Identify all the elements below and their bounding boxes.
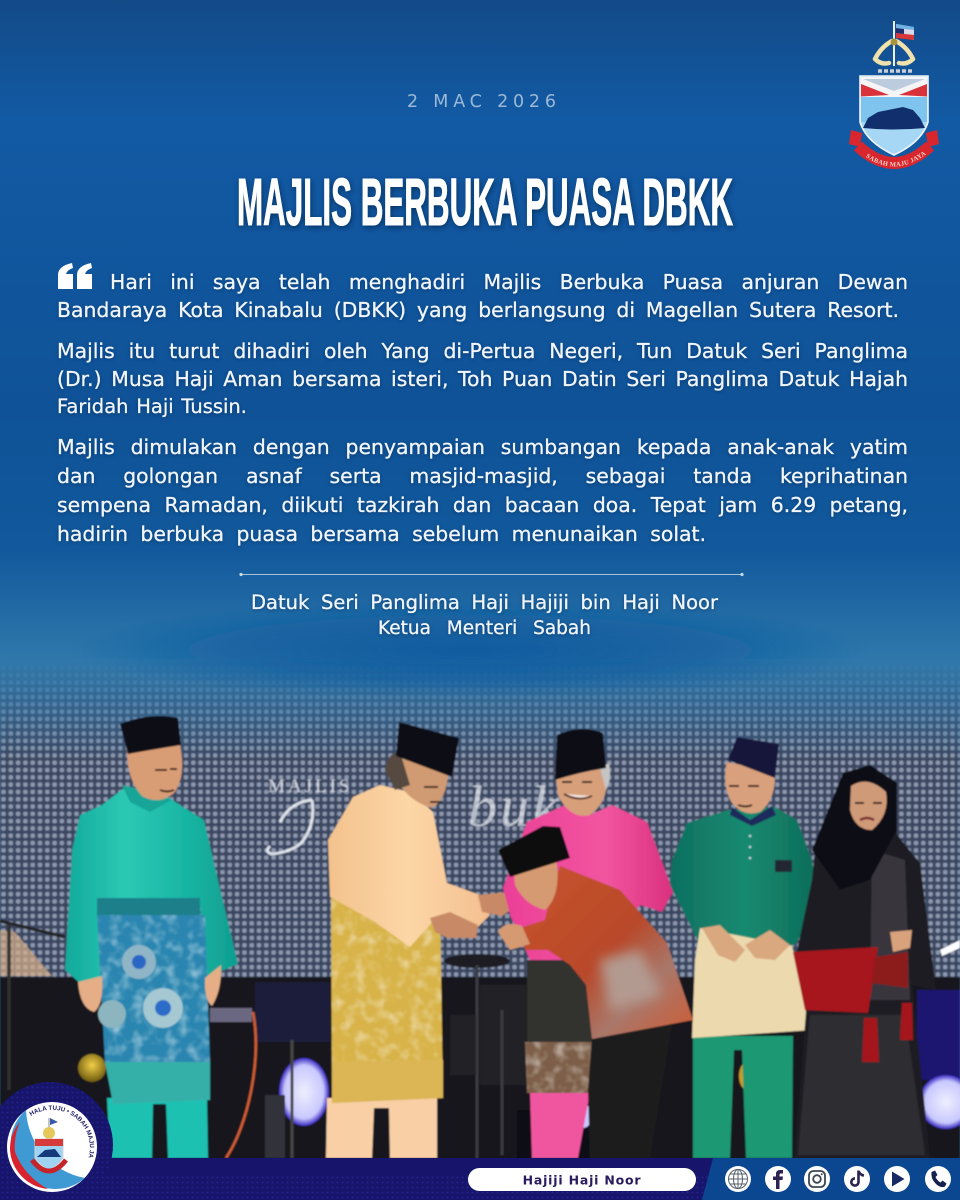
motto scroll: SABAH MAJU JAYA xyxy=(866,152,926,166)
motto scroll xyxy=(849,130,939,169)
LED screen backdrop: buka xyxy=(468,774,593,839)
circular logo badge xyxy=(0,1082,113,1192)
paragraph 1: Hari ini saya telah menghadiri Majlis Berbuka Puasa anjuran Dewan xyxy=(110,270,908,294)
paragraph 2: Majlis itu turut dihadiri oleh Yang di-Pertua Negeri, Tun Datuk Seri Panglima xyxy=(57,339,908,363)
footer bar xyxy=(0,1158,960,1200)
face xyxy=(555,763,610,816)
LED screen backdrop: MAJLIS xyxy=(268,776,353,797)
icon: tiktok xyxy=(844,1166,870,1192)
quote text block xyxy=(57,270,908,547)
flag and pole xyxy=(894,21,914,66)
face xyxy=(127,745,182,800)
footer name pill: Hajiji Haji Noor xyxy=(523,1172,641,1188)
paragraph 3 xyxy=(57,435,908,547)
icon: play xyxy=(884,1166,910,1192)
stage and instruments xyxy=(0,921,960,1167)
LED screen backdrop xyxy=(0,600,960,990)
icon: facebook xyxy=(765,1166,791,1192)
divider xyxy=(239,573,744,576)
person 5: black dress and hijab with red cloth xyxy=(793,765,936,1158)
icon: instagram xyxy=(804,1166,830,1192)
icon: phone xyxy=(925,1166,951,1192)
face xyxy=(385,752,448,808)
paragraph 1 xyxy=(57,270,908,324)
paragraph 1: Bandaraya Kota Kinabalu (DBKK) yang berlangsung di Magellan Sutera Resort. xyxy=(57,298,899,322)
paragraph 3: sempena Ramadan, diikuti tazkirah dan bacaan doa. Tepat jam 6.29 petang, xyxy=(57,493,908,517)
paragraph 3: hadirin berbuka puasa bersama sebelum menunaikan solat. xyxy=(57,522,706,546)
paragraph 2 xyxy=(57,339,908,418)
paragraph 2: (Dr.) Musa Haji Aman bersama isteri, Toh Puan Datin Seri Panglima Datuk Hajah xyxy=(57,367,908,391)
face xyxy=(725,762,775,814)
badge circular text: HALA TUJU • SABAH MAJU JAYA xyxy=(29,1105,94,1158)
paragraph 3: Majlis dimulakan dengan penyampaian sumbangan kepada anak-anak yatim xyxy=(57,435,908,459)
attribution xyxy=(251,591,718,639)
person 3: pink baju melayu xyxy=(503,729,673,1158)
footer name pill xyxy=(468,1168,696,1191)
person 2: peach baju with gold sarong xyxy=(326,722,518,1158)
social icons xyxy=(725,1166,951,1192)
date: 2 MAC 2026 xyxy=(407,92,556,112)
shield xyxy=(860,76,928,155)
attribution role: Ketua Menteri Sabah xyxy=(378,618,591,639)
person 6: boy in batik bowing xyxy=(498,826,693,1158)
small emblem xyxy=(32,1118,66,1171)
emblem: Sabah coat of arms xyxy=(849,21,939,169)
paragraph 2: Faridah Haji Tussin. xyxy=(57,395,247,418)
icon: quotation mark xyxy=(58,263,92,289)
person 1: teal baju melayu xyxy=(65,716,238,1158)
paragraph 3: dan golongan asnaf serta masjid-masjid, sebagai tanda keprihatinan xyxy=(57,464,908,488)
attribution name: Datuk Seri Panglima Haji Hajiji bin Haji Noor xyxy=(251,591,718,614)
arms holding the flag xyxy=(875,38,913,71)
icon: globe xyxy=(725,1166,751,1192)
person 4: green baju with cream samping xyxy=(670,737,819,1158)
photo: stage with guests xyxy=(0,600,960,1167)
